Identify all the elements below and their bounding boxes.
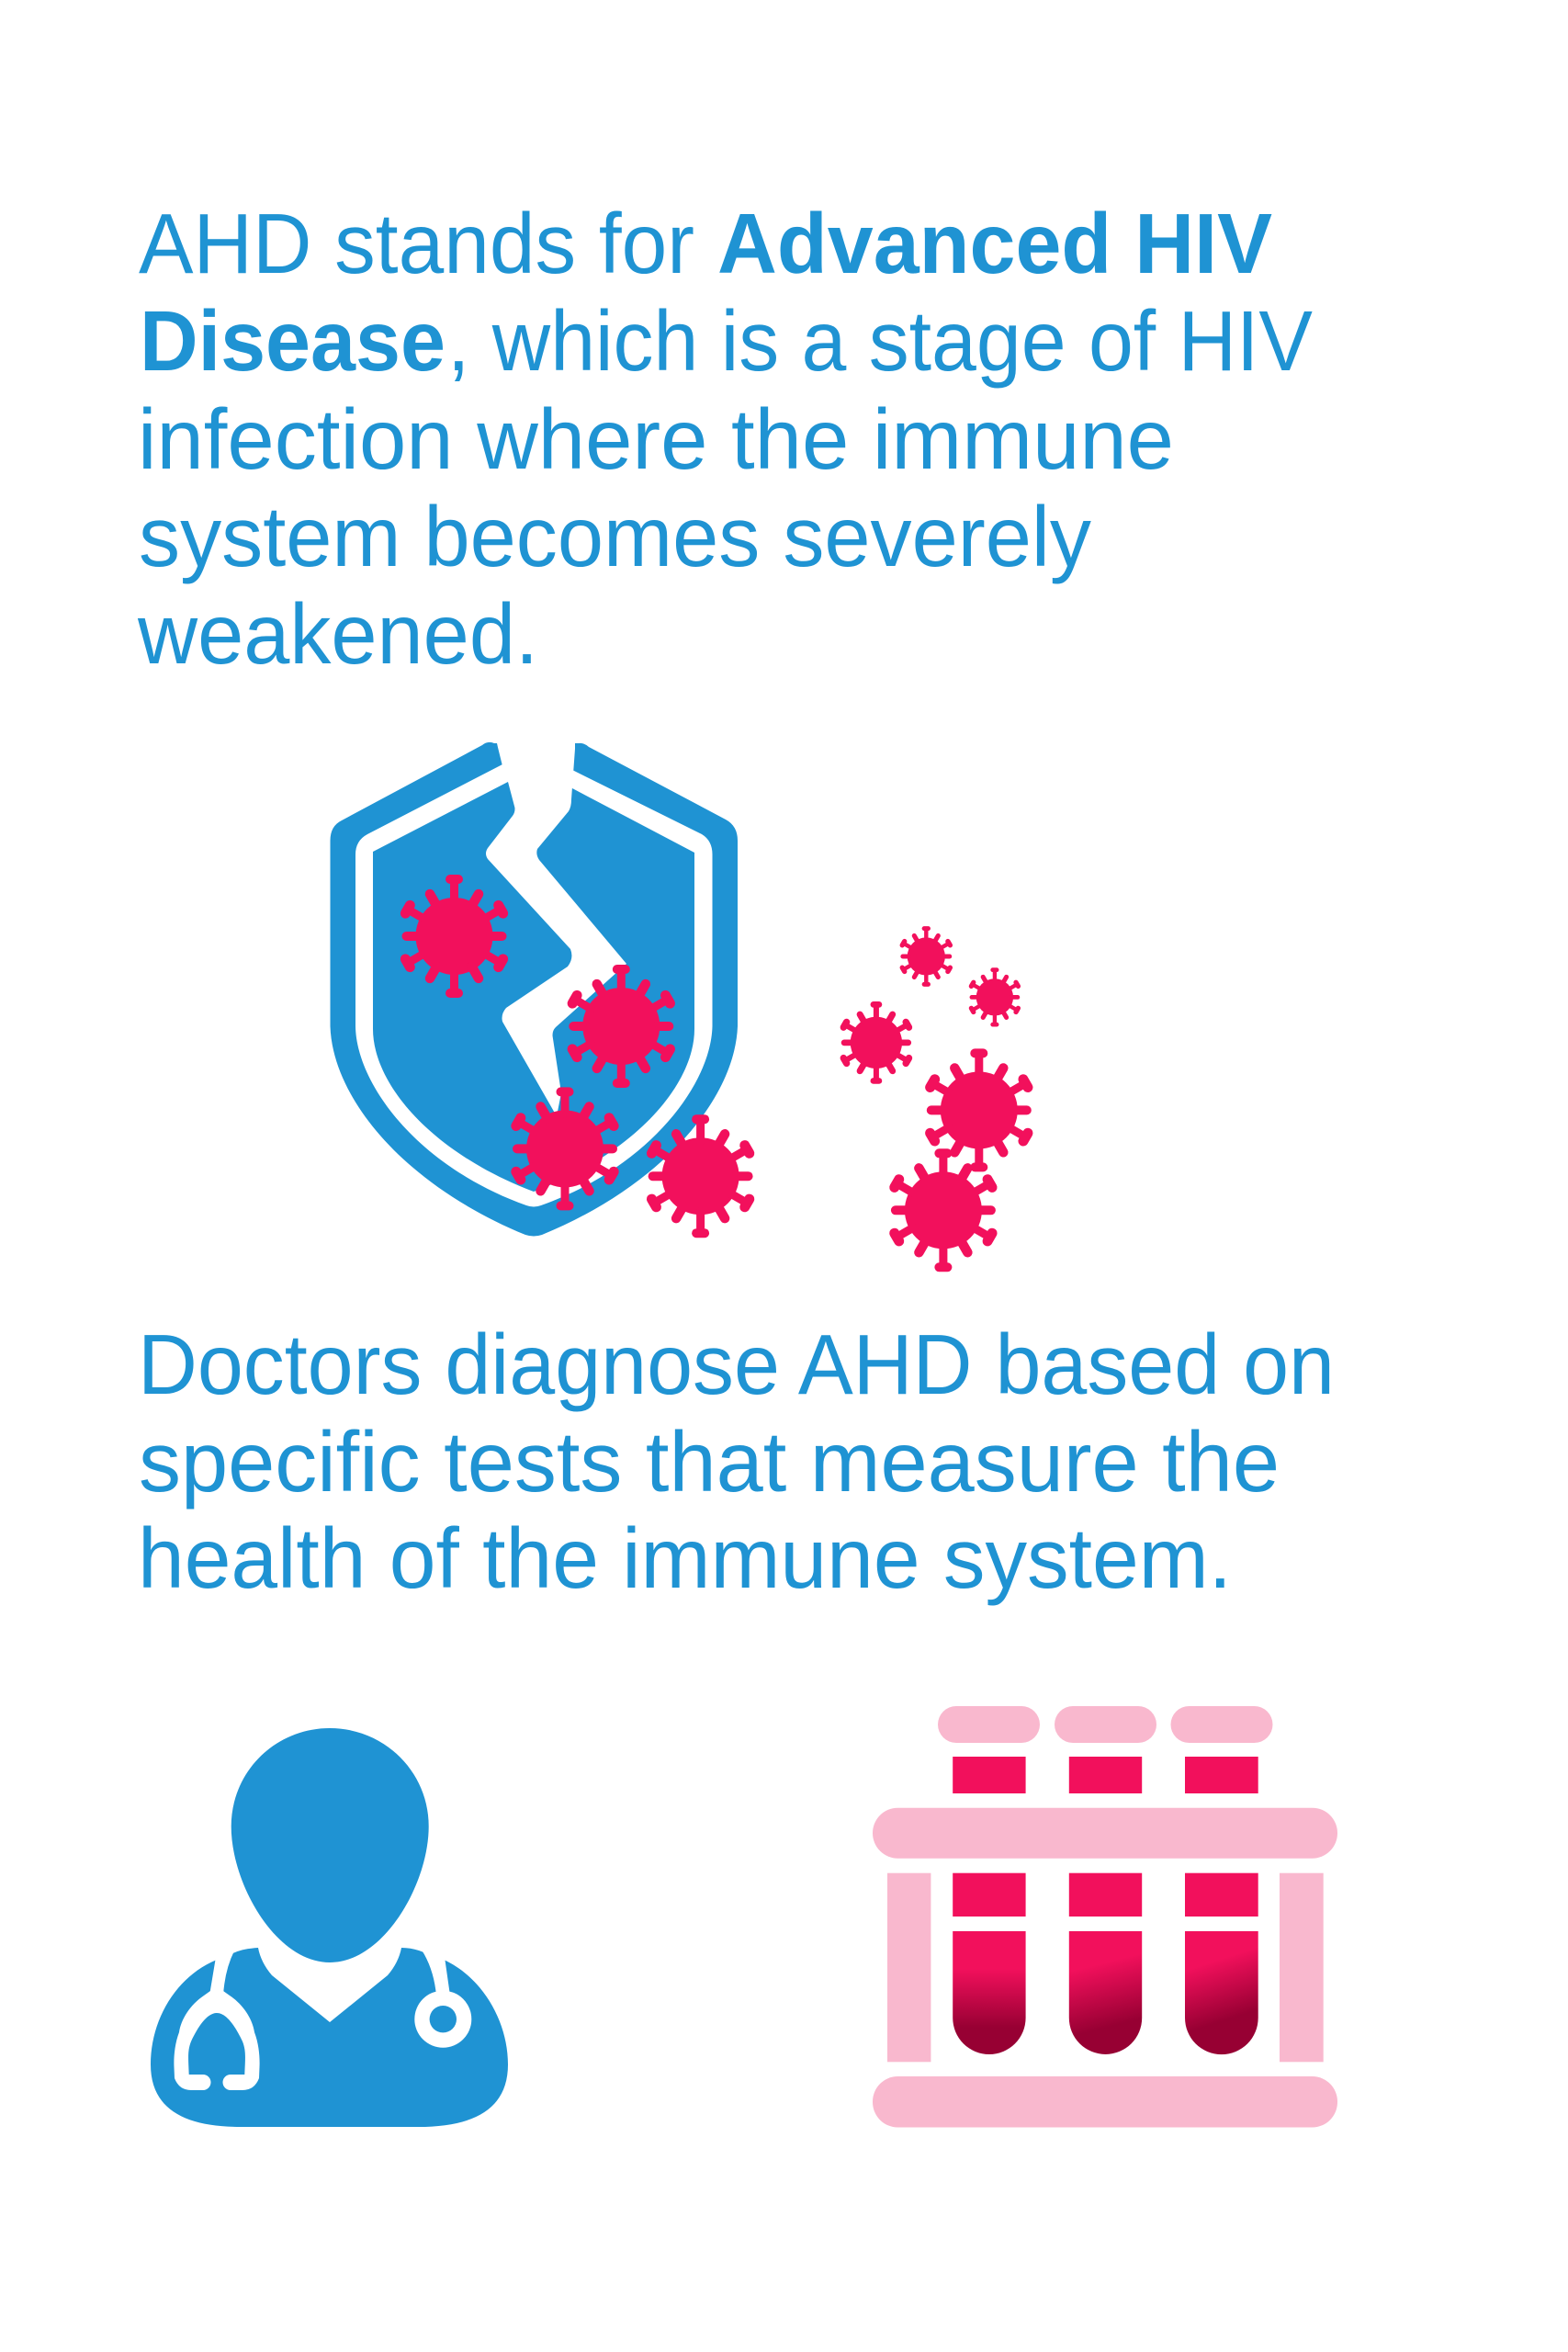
icon: floating viruses [843,929,1028,1267]
virus on shield 3 [516,1091,614,1205]
text block: AHD definition: Disease [140,293,446,389]
doctor head [231,1728,429,1962]
shield inner [373,782,694,1192]
tube caps [938,1706,1273,1743]
tube 2 [1069,1931,1142,2054]
text block: AHD definition: system becomes severely [139,489,1091,584]
rack top bar [873,1808,1337,1859]
shield outer band [331,742,738,1237]
text block: AHD definition: infection where the immune [138,391,1174,487]
text block: AHD definition: Advanced HIV [717,196,1272,291]
tube 1 [953,1931,1026,2054]
text block: diagnosis: Doctors diagnose AHD based on [138,1317,1335,1412]
medium virus [843,1004,909,1080]
virus on shield 2 [572,969,670,1083]
chest piece centre [430,2006,457,2032]
doctor body [151,1948,508,2127]
stethoscope tubes [209,1946,450,1996]
tube necks [953,1757,1258,1793]
large virus upper [931,1053,1028,1167]
text block: diagnosis: health of the immune system. [138,1510,1232,1606]
small virus right [971,970,1018,1024]
icon: doctor with stethoscope [151,1728,508,2127]
icon: cracked shield with viruses [331,735,750,1237]
text block: AHD definition [137,196,1313,682]
stethoscope earpiece [174,1991,260,2090]
virus on shield 1 [405,879,503,993]
text block: AHD definition: , which is a stage of HIV [447,293,1313,389]
icon: test tube rack [873,1706,1337,2128]
shield crack [486,735,626,1116]
shield white ring [355,764,713,1207]
text block: diagnosis [138,1317,1335,1606]
large virus lower [895,1153,992,1267]
small virus top [902,929,950,984]
text block: AHD definition: weakened. [137,586,538,682]
virus at shield edge [651,1119,750,1233]
text block: AHD definition: AHD stands for [139,196,694,291]
stethoscope chest piece [414,1991,471,2048]
rack posts [887,1873,1324,2062]
text block: diagnosis: specific tests that measure the [139,1414,1280,1510]
tube bands [953,1873,1258,1917]
rack bottom bar [873,2076,1337,2128]
tube 3 [1185,1931,1258,2054]
